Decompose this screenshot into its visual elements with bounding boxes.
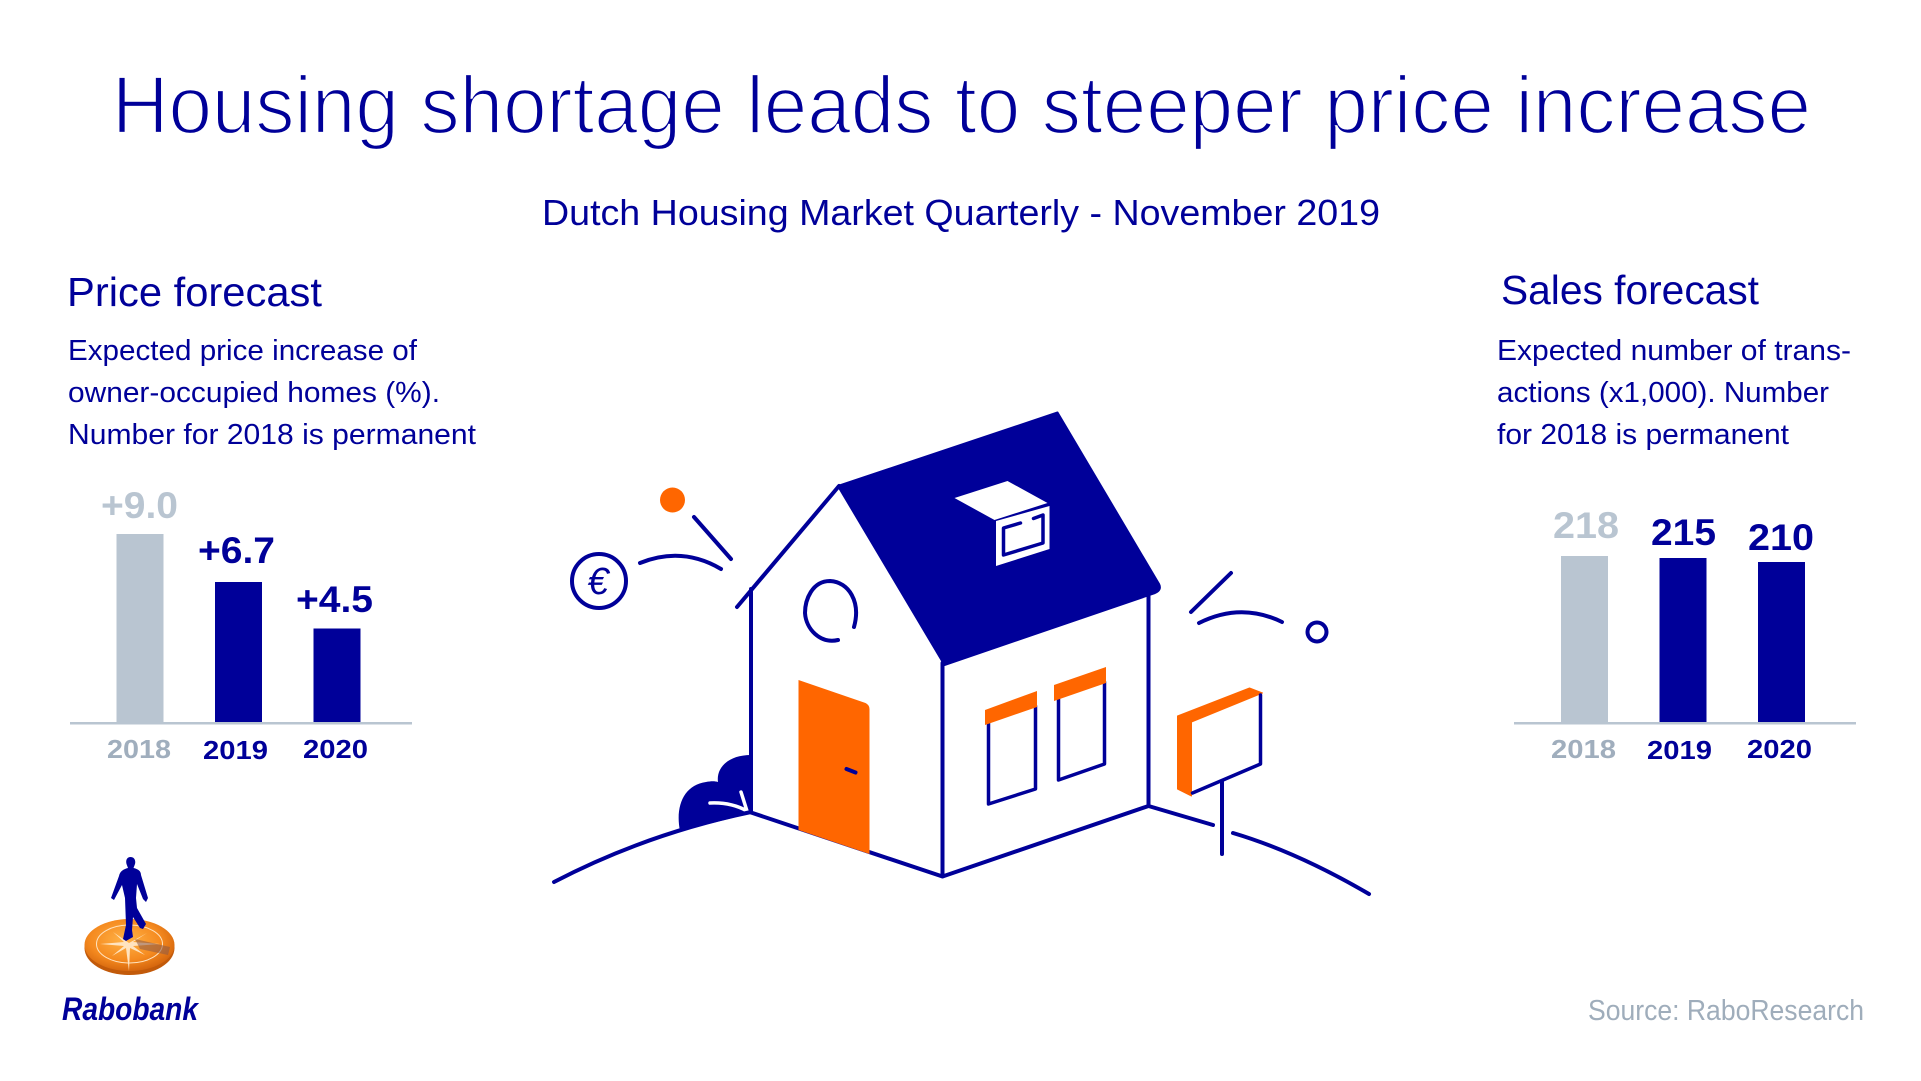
gable line: [737, 486, 839, 607]
bar chart: price forecast: +4.5: [296, 579, 373, 620]
figure: [111, 857, 148, 941]
motion line right: [1191, 573, 1231, 612]
dormer window: [954, 481, 1050, 566]
text block: price description: owner-occupied homes (%).: [68, 377, 440, 409]
bar chart: price forecast: 2018: [107, 734, 171, 764]
bar chart: price forecast: +6.7: [198, 530, 275, 571]
heading: sales forecast: Sales forecast: [1501, 267, 1760, 313]
icon: euro coin: [572, 554, 626, 608]
door: [798, 680, 870, 854]
text block: sales description: [1497, 335, 1851, 451]
ground line right: [1233, 833, 1369, 894]
bar chart: sales forecast: [1514, 505, 1856, 765]
motion arc right: [1199, 612, 1282, 623]
text block: sales description: for 2018 is permanent: [1497, 419, 1789, 451]
title: Housing shortage leads to steeper price increase: [112, 60, 1811, 151]
heading: price forecast: Price forecast: [67, 269, 323, 315]
roof: [838, 412, 1160, 665]
panel: price forecast: [67, 269, 476, 765]
window left: [985, 691, 1037, 804]
text block: sales description: Expected number of trans-: [1497, 335, 1851, 367]
icon: orange dot: [660, 488, 685, 512]
icon: euro coin: €: [587, 561, 610, 603]
motion arc left: [640, 556, 721, 569]
bar chart: price forecast: 2019: [203, 735, 268, 765]
source note: Source: RaboResearch: [1588, 995, 1864, 1027]
house walls: [751, 588, 1213, 876]
text block: price description: Expected price increase of: [68, 335, 418, 367]
bar chart: price forecast: 2020: [303, 734, 368, 764]
subtitle: Dutch Housing Market Quarterly - November 2019: [542, 192, 1380, 233]
logo: Rabobank: [62, 857, 200, 1027]
panel: sales forecast: [1497, 267, 1856, 765]
bar chart: sales forecast: 215: [1651, 512, 1716, 553]
bar chart: sales forecast: 2018: [1551, 734, 1616, 764]
house illustration: [554, 412, 1369, 894]
bar chart: price forecast: +9.0: [101, 485, 178, 526]
round attic window: [805, 581, 856, 641]
bar chart: price forecast: [70, 485, 412, 765]
icon: small circle: [1308, 622, 1326, 642]
for sale sign: [1178, 688, 1262, 854]
icon: bush: [679, 755, 752, 831]
text block: price description: [68, 335, 476, 451]
wordmark: Rabobank: [62, 991, 200, 1027]
bar chart: sales forecast: 2020: [1747, 734, 1812, 764]
bar chart: sales forecast: 218: [1553, 505, 1619, 546]
window right: [1054, 667, 1106, 780]
bar chart: sales forecast: 210: [1748, 517, 1814, 558]
disc: [84, 919, 174, 975]
text block: price description: Number for 2018 is permanent: [68, 419, 476, 451]
bar chart: sales forecast: 2019: [1647, 735, 1712, 765]
motion line left: [694, 517, 731, 559]
ground line left: [554, 812, 751, 882]
text block: sales description: actions (x1,000). Number: [1497, 377, 1829, 409]
